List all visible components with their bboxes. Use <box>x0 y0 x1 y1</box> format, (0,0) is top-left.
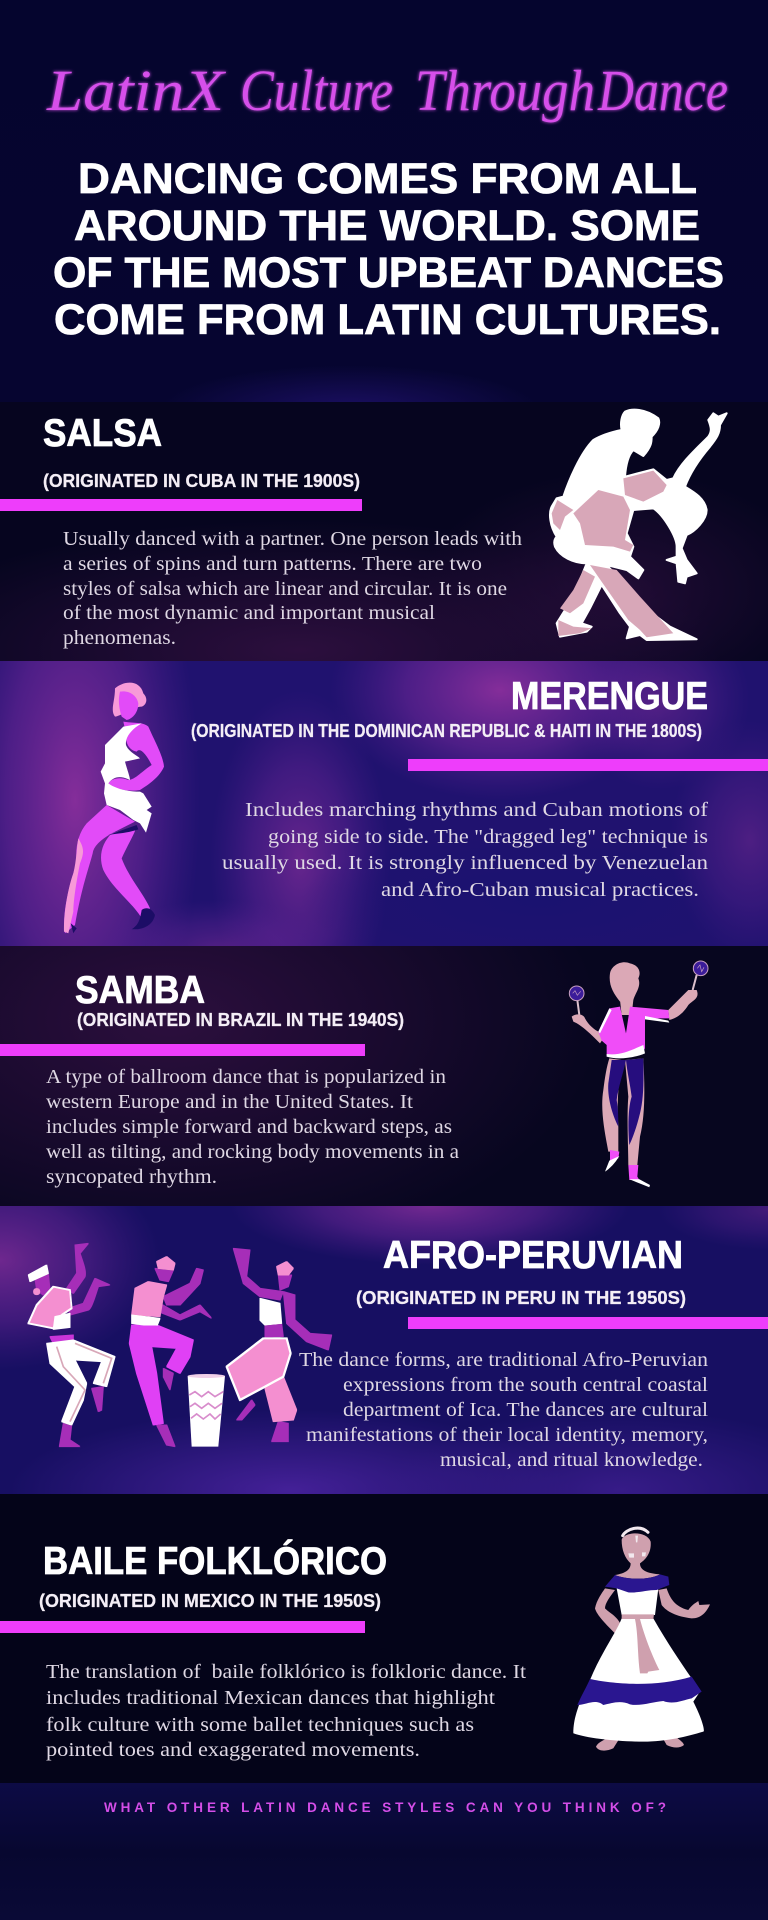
description: salsa: a series of spins and turn patterns. There are two <box>63 553 482 575</box>
description: samba <box>46 1066 459 1188</box>
origin: afro-peruvian: (ORIGINATED IN PERU IN THE 1950S) <box>356 1287 686 1308</box>
panel: afro-peruvian <box>0 1206 768 1494</box>
intro heading: COME FROM LATIN CULTURES. <box>54 296 721 344</box>
panel: merengue <box>0 661 768 946</box>
description: baile folklorico: folk culture with some ballet techniques such as <box>46 1714 474 1736</box>
panel: baile folklorico <box>0 1494 768 1783</box>
icon: salsa couple <box>550 410 727 640</box>
heading: merengue: MERENGUE <box>511 675 708 718</box>
heading: baile folklorico: BAILE FOLKLÓRICO <box>43 1539 387 1583</box>
origin: samba: (ORIGINATED IN BRAZIL IN THE 1940S) <box>77 1009 404 1030</box>
description: merengue: and Afro-Cuban musical practices. <box>381 879 699 901</box>
accent bar <box>0 1044 365 1056</box>
description: merengue: usually used. It is strongly influenced by Venezuelan <box>222 852 708 874</box>
accent bar <box>0 1621 365 1633</box>
title: Dance <box>597 58 728 123</box>
description: salsa: of the most dynamic and important musical <box>63 602 435 624</box>
description: afro-peruvian: expressions from the south central coastal <box>343 1374 708 1396</box>
origin: baile folklorico: (ORIGINATED IN MEXICO IN THE 1950S) <box>39 1590 381 1611</box>
description: salsa: styles of salsa which are linear and circular. It is one <box>63 578 507 600</box>
title: Through <box>415 58 595 123</box>
description: afro-peruvian: musical, and ritual knowledge. <box>440 1449 703 1471</box>
description: afro-peruvian <box>299 1349 708 1471</box>
description: samba: syncopated rhythm. <box>46 1166 217 1188</box>
description: baile folklorico: includes traditional Mexican dances that highlight <box>46 1687 495 1709</box>
intro heading: DANCING COMES FROM ALL <box>78 155 697 203</box>
description: samba: western Europe and in the United States. It <box>46 1091 413 1113</box>
intro heading <box>53 155 724 344</box>
description: merengue <box>222 799 708 901</box>
description: samba: well as tilting, and rocking body movements in a <box>46 1141 459 1163</box>
description: baile folklorico: The translation of baile folklórico is folkloric dance. It <box>46 1661 526 1683</box>
panel: footer <box>0 1783 768 1920</box>
icon: merengue dancer <box>64 683 164 933</box>
heading: salsa: SALSA <box>43 412 162 455</box>
panel: samba <box>0 946 768 1206</box>
description: afro-peruvian: manifestations of their local identity, memory, <box>306 1424 708 1446</box>
description: salsa: Usually danced with a partner. One person leads with <box>63 528 522 550</box>
description: merengue: Includes marching rhythms and Cuban motions of <box>245 799 708 821</box>
icon: samba dancer with maracas <box>569 961 708 1187</box>
dancer three <box>227 1248 332 1442</box>
panel: salsa <box>0 402 768 661</box>
description: merengue: going side to side. The "dragged leg" technique is <box>268 826 708 848</box>
description: samba: includes simple forward and backward steps, as <box>46 1116 452 1138</box>
icon: afro-peruvian dancers and drum <box>28 1243 332 1447</box>
drum <box>188 1374 225 1447</box>
description: afro-peruvian: The dance forms, are traditional Afro-Peruvian <box>299 1349 708 1371</box>
description: afro-peruvian: department of Ica. The dances are cultural <box>343 1399 708 1421</box>
origin: salsa: (ORIGINATED IN CUBA IN THE 1900S) <box>43 470 360 491</box>
heading: afro-peruvian: AFRO-PERUVIAN <box>383 1234 683 1277</box>
description: samba: A type of ballroom dance that is popularized in <box>46 1066 446 1088</box>
intro heading: AROUND THE WORLD. SOME <box>74 202 700 250</box>
intro heading: OF THE MOST UPBEAT DANCES <box>53 249 724 297</box>
title: Culture <box>240 58 393 123</box>
panel: header <box>44 66 730 402</box>
accent bar <box>408 1317 768 1329</box>
title: LatinX <box>46 58 227 123</box>
description: salsa: phenomenas. <box>63 627 176 649</box>
closing question: WHAT OTHER LATIN DANCE STYLES CAN YOU THINK OF? <box>104 1800 666 1815</box>
accent bar <box>0 499 362 511</box>
description: baile folklorico: pointed toes and exaggerated movements. <box>46 1739 420 1761</box>
dancer two <box>129 1257 212 1447</box>
heading: samba: SAMBA <box>75 969 205 1012</box>
icon: folklorico dancer <box>573 1528 710 1751</box>
title <box>46 58 728 123</box>
dancer one <box>28 1243 115 1447</box>
description: baile folklorico <box>46 1661 526 1761</box>
description: salsa <box>63 528 522 649</box>
accent bar <box>408 759 768 771</box>
